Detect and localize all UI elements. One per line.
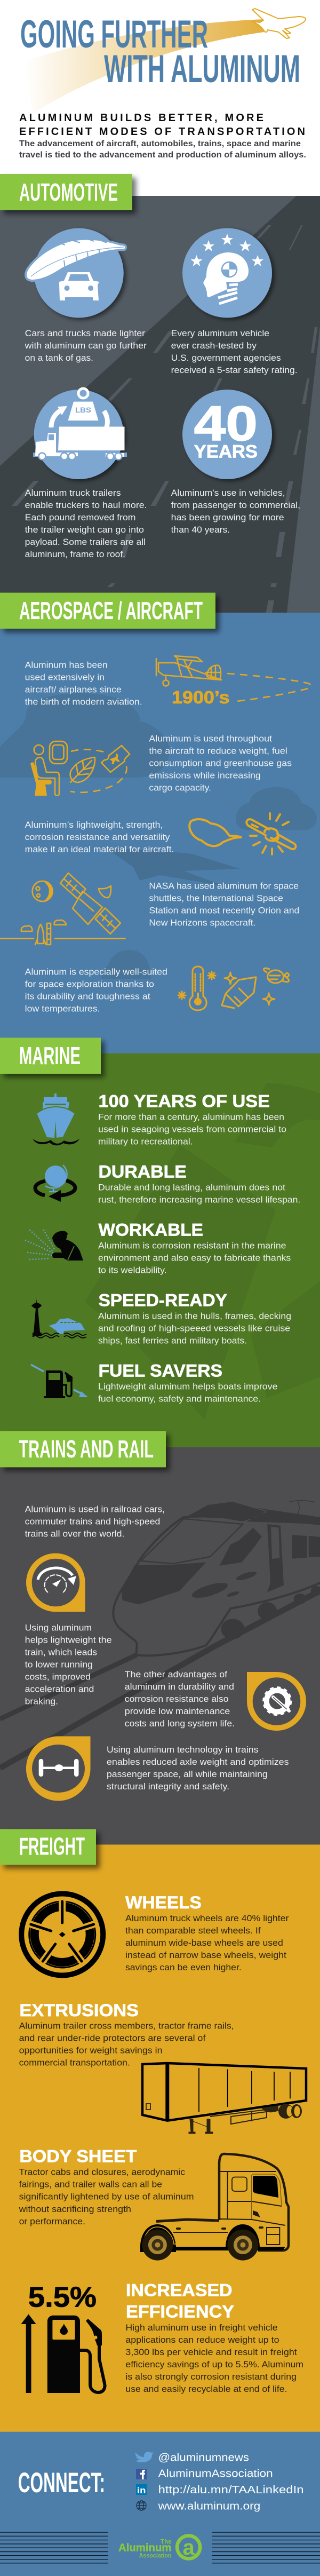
text: lighter cars: with aluminum can go further [25, 341, 147, 351]
logo: The Aluminum Association [118, 2536, 200, 2559]
text: increased efficiency: is also strongly corrosion resistant during [125, 2372, 297, 2382]
label: automotive [0, 174, 132, 210]
header: title and plane [20, 9, 306, 113]
icon: wheel [21, 1893, 103, 1976]
text: birth of aviation: used extensively in [25, 673, 105, 683]
text: other advantages: corrosion resistance also [125, 1694, 229, 1704]
text: body sheet: without sacrificing strength [19, 2205, 131, 2214]
text: reduce weight: cargo capacity. [149, 783, 211, 792]
swoosh trail [24, 19, 264, 113]
text: axle weight: passenger space, all while maintaining [107, 1770, 268, 1779]
text: increased efficiency: INCREASED [126, 2281, 233, 2300]
text: NASA: New Horizons spacecraft. [149, 918, 256, 928]
icon: linkedin [136, 2484, 147, 2495]
label: freight [0, 1829, 96, 1865]
text: lightweight the train: Using aluminum [25, 1623, 92, 1633]
text: axle weight: structural integrity and safety. [107, 1782, 229, 1792]
panel: trains and rail [0, 1447, 320, 1845]
icon: seat, window, leaf, ticket [30, 741, 130, 796]
text: extrusions: Aluminum trailer cross members, tractor frame rails, [19, 2022, 234, 2031]
text: body sheet: Tractor cabs and closures, aerodynamic [19, 2167, 185, 2177]
label: automotive: AUTOMOTIVE [19, 178, 118, 206]
text: wheels: savings can be even higher. [125, 1963, 242, 1972]
circle: 40 years [182, 390, 272, 479]
text: ideal material: corrosion resistance and versatility [25, 833, 170, 842]
text: crash test: ever crash-tested by [171, 341, 257, 351]
text: space exploration: for space exploration thanks to [25, 980, 154, 989]
logo: The Aluminum Association: The [161, 2539, 172, 2546]
text: 100 years: used in seagoing vessels from commercial to [98, 1125, 286, 1135]
title [20, 13, 300, 91]
icon: welder [26, 1230, 83, 1261]
text: used in railroad cars: trains all over the world. [25, 1529, 124, 1539]
intro text: The advancement of aircraft, automobiles, trains, space and marine [19, 139, 301, 148]
text: lighter cars [25, 329, 147, 363]
text: wheels: aluminum wide-base wheels are used [125, 1938, 283, 1948]
circle: 40 years: 40 [194, 397, 258, 451]
text: extrusions: opportunities for weight savings in [19, 2046, 163, 2056]
label: freight: FREIGHT [19, 1833, 85, 1860]
text: crash test: Every aluminum vehicle [171, 329, 269, 338]
text: wheels: instead of narrow base wheels, weight [125, 1951, 286, 1960]
icon: feather [26, 239, 126, 281]
text: 100 years [98, 1092, 286, 1147]
text: truck trailers: payload. Some trailers are all [25, 537, 146, 547]
icon: biplane and 1900's [156, 656, 311, 707]
text: linkedin: http://alu.mn/TAALinkedIn [158, 2484, 304, 2496]
text: lightweight the train [25, 1623, 112, 1707]
text: fuel savers: Lightweight aluminum helps boats improve [98, 1382, 277, 1392]
text: birth of aviation: the birth of modern aviation. [25, 697, 142, 707]
text: workable: WORKABLE [98, 1220, 203, 1239]
circle: truck and weight: LBS [75, 406, 91, 414]
icon: space needle and ferry [31, 1298, 86, 1338]
text: ideal material: Aluminum’s lightweight, strength, [25, 820, 163, 830]
text: used in railroad cars: commuter trains and high-speed [25, 1517, 160, 1527]
text: facebook: AluminumAssociation [158, 2468, 273, 2479]
text: speed-ready: ships, fast ferries and military boats. [98, 1336, 247, 1346]
intro text: travel is tied to the advancement and production of aluminum alloys. [19, 150, 306, 160]
text: truck trailers: aluminum, frame to roof. [25, 550, 125, 559]
text: reduce weight [149, 734, 292, 792]
icon: airplane [252, 9, 306, 38]
text: lightweight the train: braking. [25, 1697, 58, 1707]
text: durable: Durable and long lasting, aluminum does not [98, 1183, 285, 1193]
text: speed-ready: Aluminum is used in the hulls, frames, decking [98, 1312, 291, 1321]
label: marine: MARINE [19, 1042, 81, 1069]
text: workable: to its weldability. [98, 1265, 167, 1275]
text: NASA [149, 881, 299, 928]
text: increased efficiency: use and easily recyclable at end of life. [125, 2384, 287, 2394]
text: 40 years [171, 488, 300, 535]
text: body sheet: significantly lightened by use of aluminum [19, 2192, 194, 2201]
text: birth of aviation: Aluminum has been [25, 661, 108, 670]
text: NASA: Station and most recently Orion and [149, 906, 299, 915]
icon: biplane and 1900's: 1900’s [172, 687, 229, 707]
circle: crash test head and stars [182, 228, 272, 318]
text: fuel savers [98, 1361, 277, 1404]
icon: satellite and rocket [0, 873, 125, 945]
text: durable: DURABLE [98, 1162, 187, 1182]
text: ideal material [25, 820, 174, 854]
icon: cycle arrows [51, 410, 62, 427]
text: space exploration: Aluminum is especially well-suited [25, 968, 167, 977]
panel: freight [0, 1844, 320, 2432]
text: lightweight the train: acceleration and [25, 1684, 94, 1694]
text: lightweight the train: train, which leads [25, 1648, 97, 1658]
label: trains and rail: TRAINS AND RAIL [19, 1435, 154, 1463]
text: wheels [125, 1893, 289, 1972]
text: truck trailers: Aluminum truck trailers [25, 488, 121, 498]
icon: truck [33, 453, 127, 457]
text: increased efficiency: applications can reduce weight up to [125, 2335, 279, 2345]
icon: thermometer, rocket, planet [178, 966, 289, 1010]
text: reduce weight: the aircraft to reduce weight, fuel [149, 746, 287, 756]
text: birth of aviation: aircraft/ airplanes since [25, 685, 122, 695]
text: truck trailers: enable truckers to haul more. [25, 501, 147, 510]
text: ideal material: make it an ideal material for aircraft. [25, 845, 174, 854]
text: reduce weight: consumption and greenhouse gas [149, 758, 292, 768]
text: increased efficiency: 3,300 lbs per vehicle and result in freight [125, 2348, 297, 2357]
text: lightweight the train: to lower running [25, 1660, 93, 1669]
circle: feather and car [26, 228, 126, 318]
circle: 40 years: YEARS [194, 442, 258, 462]
text: crash test: received a 5-star safety rating. [171, 366, 298, 375]
text: body sheet: BODY SHEET [19, 2147, 137, 2166]
text: space exploration: its durability and toughness at [25, 992, 150, 1002]
text: twitter handle: @aluminumnews [158, 2452, 249, 2463]
text: extrusions: EXTRUSIONS [19, 2001, 139, 2020]
text: workable: environment and also easy to fabricate thanks [98, 1253, 291, 1263]
label: marine [0, 1037, 101, 1074]
text: speed-ready: and roofing of high-speeed vessels like cruise [98, 1323, 290, 1333]
text: space exploration: low temperatures. [25, 1004, 100, 1014]
text: wheels: than comparable steel wheels. If [125, 1926, 261, 1936]
panel: connect footer [0, 2432, 320, 2576]
train illustration [0, 1501, 320, 1768]
intro text: ALUMINUM BUILDS BETTER, MORE [19, 112, 263, 124]
text: other advantages: provide low maintenance [125, 1707, 230, 1716]
text: body sheet: fairings, and trailer walls can all be [19, 2179, 162, 2189]
text: website: www.aluminum.org [157, 2501, 260, 2512]
badge: speedometer [26, 1553, 85, 1612]
text: other advantages: The other advantages of [125, 1670, 227, 1679]
icon: car [59, 272, 99, 300]
text: used in railroad cars: Aluminum is used in railroad cars, [25, 1505, 165, 1515]
text: truck trailers [25, 488, 147, 559]
text: other advantages: aluminum in durability and [125, 1682, 234, 1692]
text: used in railroad cars [25, 1505, 165, 1539]
panel: aerospace [0, 613, 320, 1053]
text: NASA: NASA has used aluminum for space [149, 881, 299, 891]
icon: trailer [142, 2063, 306, 2134]
panel: marine [0, 1053, 320, 1447]
icon: weight [78, 389, 88, 398]
text: reduce weight: emissions while increasing [149, 771, 261, 780]
text: other advantages: costs and long system life. [125, 1719, 235, 1729]
label: trains and rail [0, 1431, 166, 1467]
text: workable: Aluminum is corrosion resistant in the marine [98, 1241, 286, 1250]
text: lightweight the train: costs, improved [25, 1673, 91, 1682]
text: 40 years: than 40 years. [171, 525, 230, 535]
label: aerospace [0, 593, 215, 629]
intro text [19, 112, 306, 160]
text: speed-ready: SPEED-READY [98, 1291, 227, 1310]
text: durable: rust, therefore increasing marine vessel lifespan. [98, 1195, 300, 1205]
icon: globe [137, 2501, 146, 2510]
text: increased efficiency: efficiency savings of up to 5.5%. Aluminum [125, 2360, 303, 2369]
text: increased efficiency: EFFICIENCY [126, 2302, 234, 2321]
text: increased efficiency: High aluminum use in freight vehicle [125, 2323, 277, 2333]
text: wheels: WHEELS [125, 1893, 202, 1912]
logo: The Aluminum Association: Association [139, 2553, 172, 2559]
text: 40 years: from passenger to commercial, [171, 501, 300, 510]
text: fuel savers: FUEL SAVERS [98, 1361, 222, 1381]
icon: truck cab [140, 2154, 289, 2261]
text: axle weight: enables reduced axle weight and optimizes [107, 1757, 289, 1767]
text: axle weight: Using aluminum technology in trains [107, 1745, 258, 1755]
text: 40 years: Aluminum's use in vehicles, [171, 488, 285, 498]
text: 100 years: 100 YEARS OF USE [98, 1092, 270, 1111]
icon: 5.5% fuel pump and up arrow [21, 2281, 105, 2393]
text: lightweight the train: helps lightweight the [25, 1635, 112, 1645]
text: truck trailers: Each pound removed from [25, 513, 135, 522]
heading: connect: CONNECT: [18, 2467, 105, 2499]
text: other advantages [125, 1670, 235, 1729]
icon: feather and chain [189, 813, 295, 854]
icon: twitter [135, 2452, 154, 2462]
text: reduce weight: Aluminum is used throughout [149, 734, 272, 743]
text: truck trailers: the trailer weight can go into [25, 525, 144, 535]
icon: linkedin: in [137, 2485, 146, 2495]
panel: automotive [0, 196, 320, 613]
text: crash test: U.S. government agencies [171, 353, 281, 363]
text: extrusions: and rear under-ride protectors are several of [19, 2034, 206, 2043]
text: extrusions [19, 2001, 234, 2068]
logo: The Aluminum Association: Aluminum [118, 2542, 172, 2554]
text: crash test [171, 329, 298, 375]
icon: globe with arrow [35, 1165, 75, 1202]
text: durable [98, 1162, 300, 1205]
text: birth of aviation [25, 661, 142, 707]
logo: The Aluminum Association: a [182, 2536, 195, 2559]
icon: ship [33, 1093, 79, 1145]
text: 100 years: For more than a century, aluminum has been [98, 1113, 284, 1122]
text: increased efficiency [125, 2281, 303, 2394]
text: workable [98, 1220, 291, 1275]
circle: truck and weight [33, 389, 127, 479]
text: axle weight [107, 1745, 289, 1792]
text: body sheet: or performance. [19, 2217, 85, 2226]
text: NASA: shuttles, the International Space [149, 893, 283, 903]
intro text: EFFICIENT MODES OF TRANSPORTATION [19, 126, 305, 138]
text: lighter cars: on a tank of gas. [25, 353, 93, 363]
text: extrusions: commercial transportation. [19, 2058, 130, 2068]
icon: facebook [136, 2469, 147, 2479]
text: 40 years: has been growing for more [171, 513, 284, 522]
badge: gear and wrench [247, 1672, 306, 1731]
badge: axle [26, 1737, 90, 1801]
text: lighter cars: Cars and trucks made lighter [25, 329, 146, 338]
text: body sheet [19, 2147, 194, 2226]
text: wheels: Aluminum truck wheels are 40% lighter [125, 1914, 289, 1923]
text: fuel savers: fuel economy, safety and maintenance. [98, 1394, 261, 1404]
icon: 5.5% fuel pump and up arrow: 5.5% [28, 2281, 97, 2313]
text: 100 years: military to recreational. [98, 1137, 193, 1147]
icon: fuel pump with falling arrow [31, 1365, 88, 1398]
text: speed-ready [98, 1291, 291, 1346]
text: space exploration [25, 968, 167, 1014]
label: aerospace: AEROSPACE / AIRCRAFT [19, 597, 203, 624]
